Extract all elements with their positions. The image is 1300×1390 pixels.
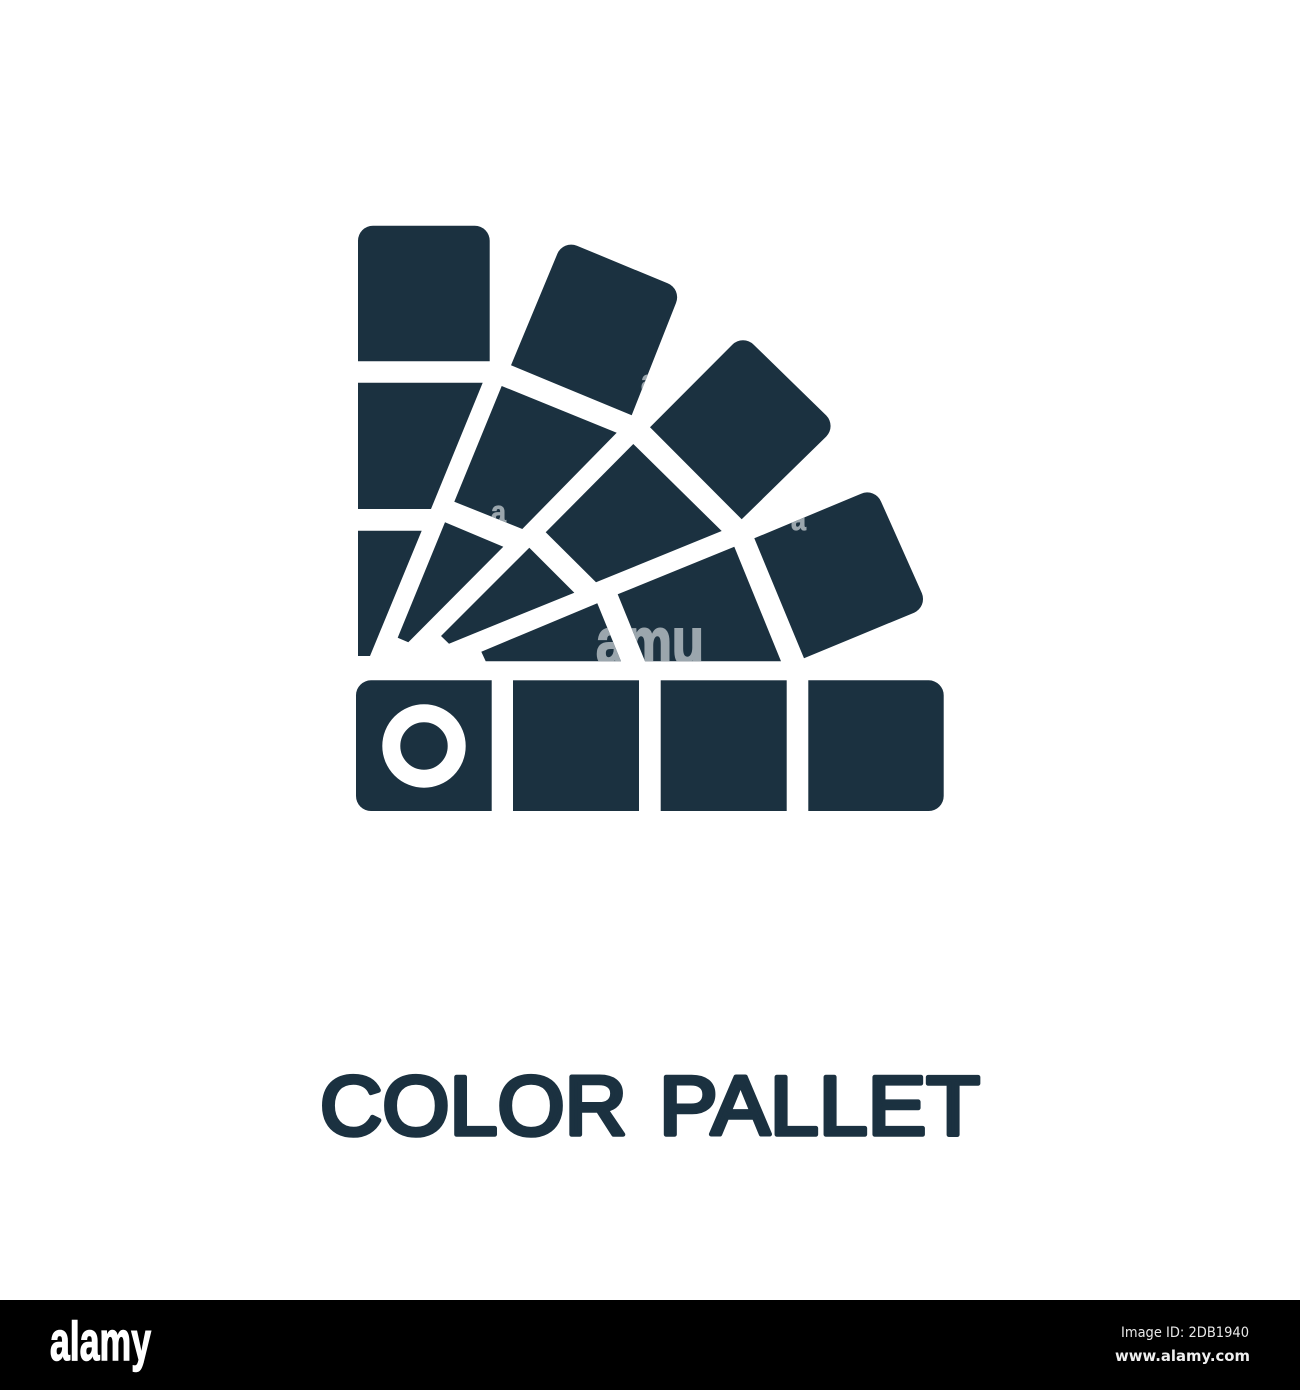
icon: pivot ring bbox=[391, 713, 457, 779]
title: COLOR bbox=[320, 1058, 627, 1152]
website: www.alamy.com bbox=[1115, 1347, 1250, 1365]
watermark word on lower swatches: amu bbox=[596, 604, 704, 678]
watermark fragments bbox=[491, 363, 806, 678]
watermark letter on right swatch: a bbox=[791, 501, 806, 537]
image id: Image ID: 2DB1940 bbox=[1121, 1325, 1249, 1341]
swatch column: vertical strip bbox=[358, 226, 490, 656]
swatch strip: rotated 67.5 degrees bbox=[481, 492, 923, 661]
swatch strip: rotated 45 degrees bbox=[441, 340, 831, 644]
title bbox=[320, 1058, 980, 1152]
title: PALLET bbox=[659, 1058, 980, 1152]
swatch strip: rotated 22.5 degrees bbox=[398, 245, 677, 642]
swatch strip: horizontal base bbox=[356, 680, 944, 811]
watermark letter on upper swatch: a bbox=[641, 363, 656, 399]
watermark letter on inner swatch: a bbox=[491, 494, 506, 530]
footer bar bbox=[0, 1300, 1300, 1390]
icon: color palette fan bbox=[356, 226, 944, 811]
footer logo: alamy bbox=[50, 1310, 151, 1372]
